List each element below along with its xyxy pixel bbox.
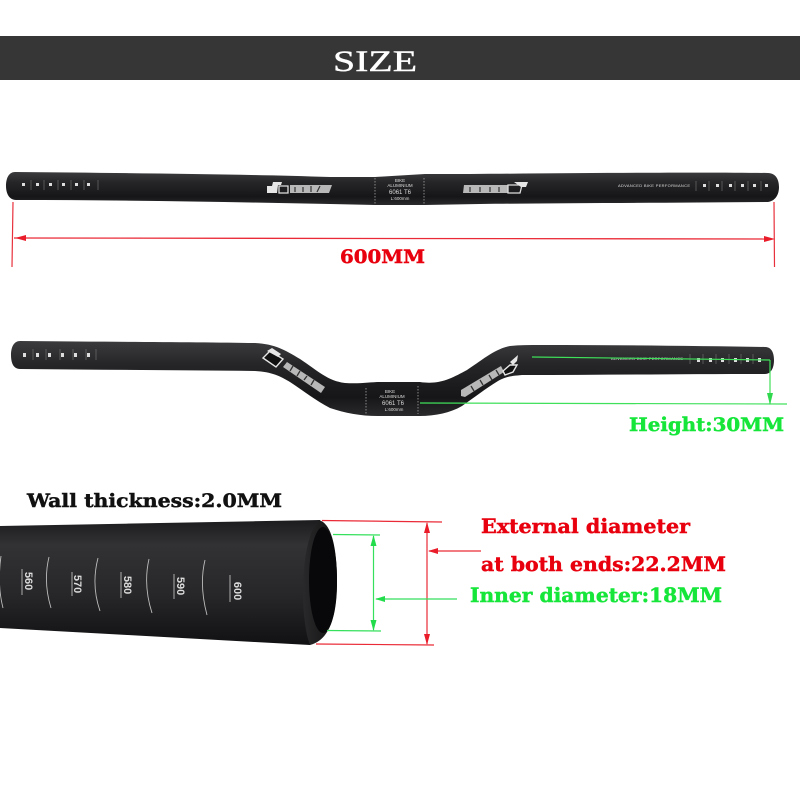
label: external diameter: External diameter — [481, 514, 690, 538]
tube scale numbers — [22, 572, 243, 600]
tube scale numbers: 590 — [174, 577, 186, 595]
label: Height:30MM: Height:30MM — [629, 414, 784, 436]
tube scale numbers: 570 — [71, 575, 83, 593]
straight bar logo: right — [463, 182, 528, 193]
label: at both ends: at both ends:22.2MM — [481, 552, 726, 576]
riser bar centre label: L:600mm — [385, 407, 404, 412]
straight bar logo: left — [267, 182, 332, 193]
tube rim — [303, 520, 337, 645]
riser bar centre label: ALUMINIUM — [379, 394, 405, 399]
riser bar end ticks: right — [690, 354, 761, 364]
riser bar centre label: BIKE — [385, 389, 395, 394]
label: 600MM: 600MM — [340, 246, 425, 268]
straight bar end ticks: right — [696, 181, 768, 191]
label: inner diameter: Inner diameter:18MM — [470, 583, 722, 607]
riser bar centre label: 6061 T6 — [382, 401, 405, 407]
straight bar end ticks: left — [22, 180, 98, 190]
tube scale numbers: 580 — [121, 576, 133, 594]
tube scale numbers: 560 — [22, 572, 34, 590]
tube scale numbers: 600 — [231, 582, 243, 600]
label: wall thickness: Wall thickness:2.0MM — [26, 491, 282, 512]
straight bar small print: ADVANCED BIKE PERFORMANCE — [618, 183, 690, 188]
straight bar centre label: BIKE — [395, 178, 405, 183]
tube scale marks — [0, 556, 230, 615]
straight bar centre label — [375, 178, 424, 204]
tube opening — [309, 527, 337, 633]
riser bar logo: left — [263, 348, 325, 393]
height dimension: 30MM — [420, 357, 787, 436]
riser handlebar — [11, 341, 774, 416]
inner diameter dimension — [327, 534, 457, 631]
straight handlebar — [6, 172, 779, 205]
riser bar small print: ADVANCED BIKE PERFORMANCE — [611, 356, 683, 361]
straight bar centre label: ALUMINIUM — [387, 183, 413, 188]
external diameter dimension — [316, 520, 481, 645]
tube close-up — [0, 520, 337, 645]
title banner — [0, 36, 800, 80]
title: SIZE — [333, 45, 417, 78]
straight bar centre label: 6061 T6 — [389, 190, 412, 196]
width dimension: 600MM — [12, 202, 775, 268]
straight bar centre label: L:600mm — [391, 196, 410, 201]
riser bar centre label — [366, 386, 418, 414]
riser bar end ticks: left — [23, 349, 96, 360]
riser bar logo: right — [461, 355, 518, 397]
